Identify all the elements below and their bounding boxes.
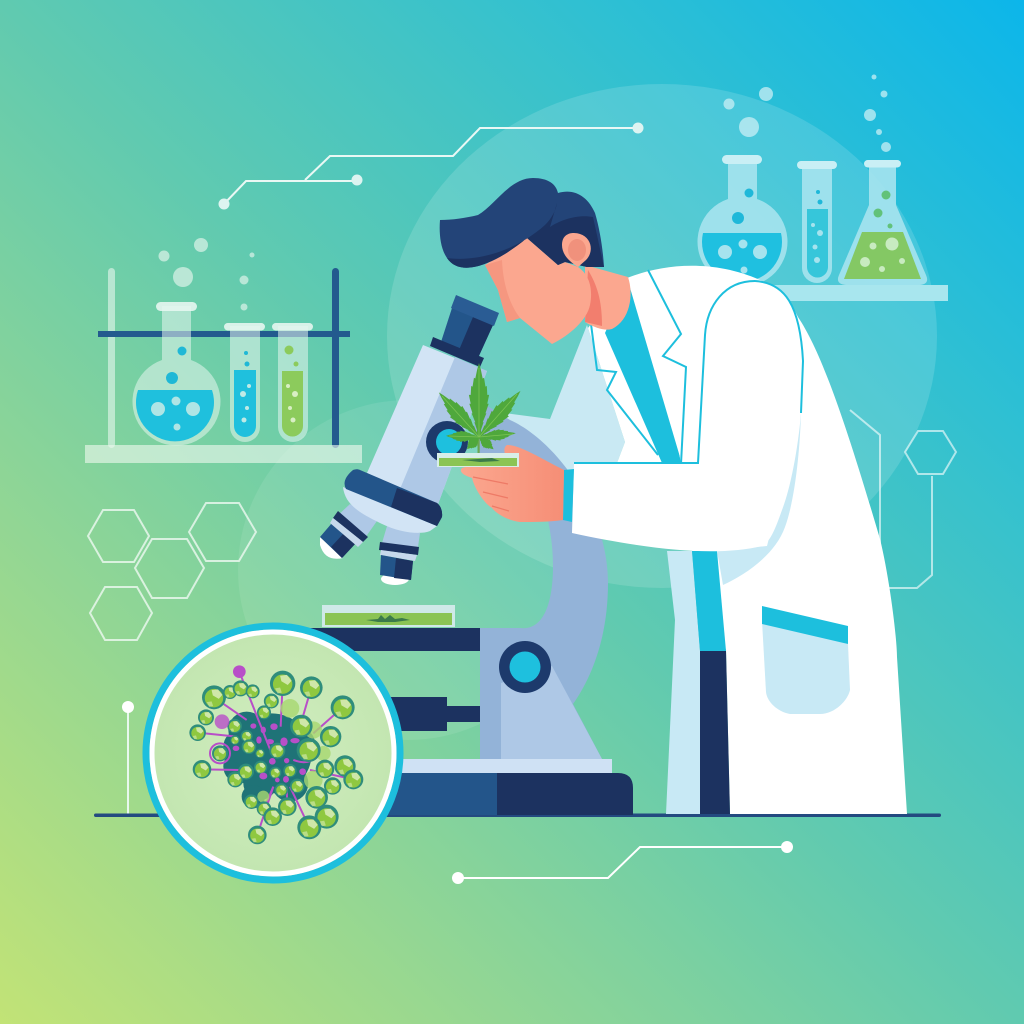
lens ring <box>146 626 400 880</box>
base column light <box>501 666 602 759</box>
eyepiece <box>430 295 499 367</box>
rack posts and bar <box>98 268 350 448</box>
base knob <box>499 641 551 693</box>
ear <box>562 233 591 267</box>
dark core <box>223 712 315 808</box>
microscope body <box>367 345 487 507</box>
hair <box>440 178 604 268</box>
sleeve shadow <box>717 413 801 585</box>
coat pocket <box>762 606 850 714</box>
objective lens: left <box>320 504 377 559</box>
round flask <box>697 155 788 287</box>
hair shadow <box>447 203 604 268</box>
molecule cluster <box>189 665 363 844</box>
stage <box>307 628 480 651</box>
neck <box>585 265 631 330</box>
hexagons: left cluster <box>88 503 256 640</box>
rack shelf <box>85 445 362 463</box>
atoms <box>189 671 363 844</box>
microscope <box>307 295 633 815</box>
nosepiece <box>343 469 442 533</box>
scientist: head <box>440 178 631 344</box>
circuit line and hexagon: right <box>850 410 956 600</box>
coat body <box>588 266 907 814</box>
left lab rack with glassware <box>85 238 362 463</box>
cyan shirt strip <box>692 551 726 651</box>
ground line <box>94 814 941 817</box>
face <box>485 238 591 344</box>
bubbles above flask <box>158 238 254 310</box>
face shade <box>485 260 520 322</box>
slide in hand <box>437 453 519 467</box>
finger creases <box>473 477 509 511</box>
scientist: sleeve <box>572 281 803 551</box>
cyan shirt band <box>605 281 681 465</box>
shelf <box>765 285 948 301</box>
lower backdrop circle <box>238 400 578 740</box>
objective lens: right <box>379 526 420 585</box>
right lapel <box>648 270 686 464</box>
molecule magnifier callout <box>146 626 400 880</box>
right shelf with glassware <box>697 74 948 301</box>
test tube: blue <box>224 323 265 442</box>
coat front left panel <box>666 551 700 814</box>
bubbles above right glassware <box>724 74 891 152</box>
thumb and palm <box>461 445 564 522</box>
navy trousers <box>700 651 730 814</box>
base plate <box>401 759 612 773</box>
large backdrop circle <box>387 84 937 588</box>
specimen slide <box>322 605 455 627</box>
test tube <box>797 161 837 283</box>
cannabis leaf <box>433 363 527 453</box>
circuit line: top <box>218 122 644 210</box>
circuit line: bottom <box>452 841 793 884</box>
bonds <box>198 672 353 835</box>
focus knob <box>426 421 468 463</box>
neck shade <box>585 270 602 326</box>
arm <box>470 395 608 759</box>
test tube: green <box>272 323 313 442</box>
left lapel <box>591 324 658 455</box>
purple atoms <box>215 665 306 783</box>
erlenmeyer flask <box>838 160 927 285</box>
stage clamp <box>390 697 480 731</box>
inner light panel <box>480 325 625 480</box>
circuit line: left pin <box>122 701 134 815</box>
round flask <box>132 302 220 446</box>
hand holding slide <box>461 445 574 522</box>
scientist: torso and lab coat <box>480 266 907 814</box>
pale atoms <box>257 699 331 803</box>
cuff <box>563 469 574 522</box>
base foot <box>387 773 633 815</box>
white inner ring <box>152 632 394 874</box>
